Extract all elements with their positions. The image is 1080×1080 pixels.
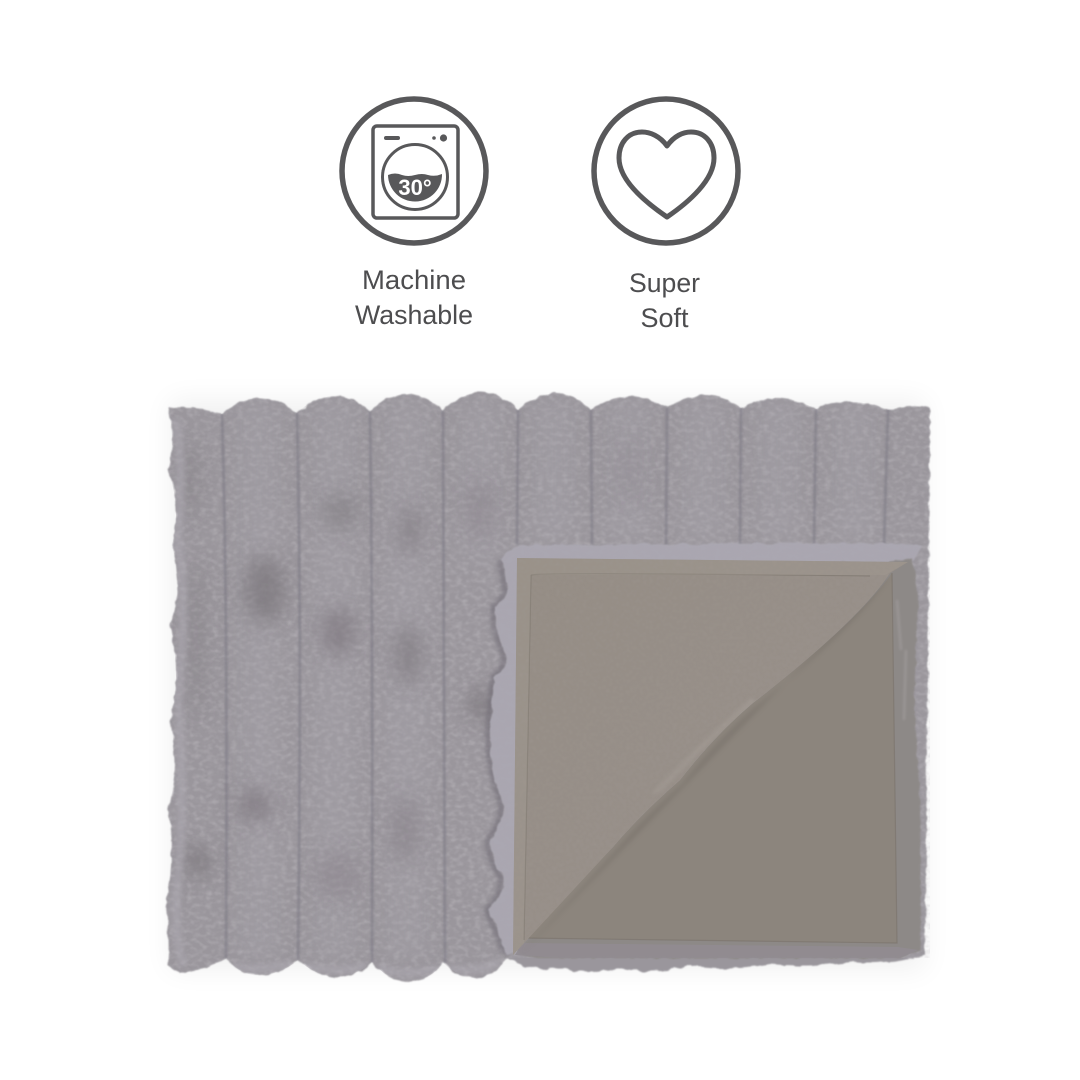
lower fleece lining and fur right band [515,558,921,958]
product photo: folded faux fur blanket [160,385,940,985]
channel seams [222,408,888,963]
label: Super Soft: Soft [640,303,689,333]
label: Machine Washable: Machine [362,265,466,295]
pale fur fringe along the left and bottom [176,420,500,973]
icon: machine washable 30 degrees: 30° [398,175,432,200]
icon: heart, super soft [594,99,738,243]
label: Super Soft [629,268,700,333]
darker matted fur patches [174,453,492,895]
folded corner: pale fur edge [485,540,925,960]
fur front with vertical channels [160,385,940,985]
channel highlights [858,402,864,404]
label: Super Soft: Super [629,268,700,298]
icon: machine washable 30 degrees [342,99,486,243]
folded-over fleece triangle [510,555,910,957]
label: Machine Washable: Washable [355,300,473,330]
label: Machine Washable [355,265,473,330]
